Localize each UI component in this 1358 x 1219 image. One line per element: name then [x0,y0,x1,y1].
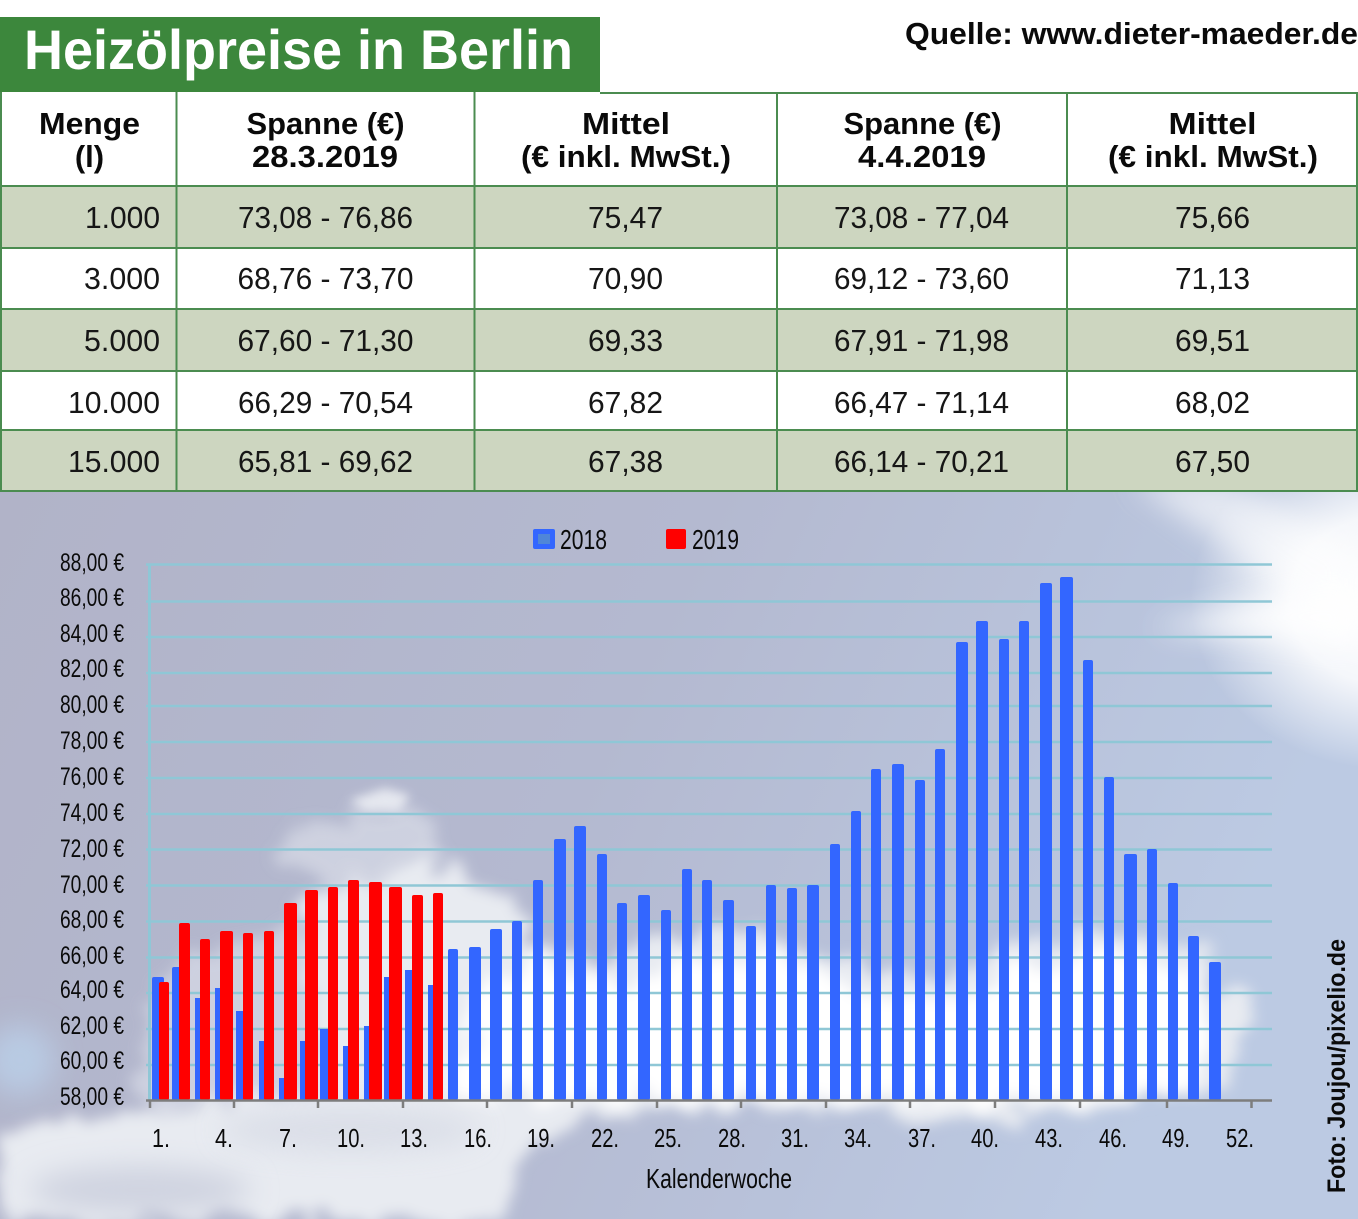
table row: 1.000: 75,47 [588,200,663,235]
x axis labels: 16. [464,1123,492,1153]
y axis labels: 76,00 € [60,763,124,791]
table header row: Mittel [582,106,670,141]
table row: 3.000: 69,12 - 73,60 [834,261,1009,296]
x axis labels: 25. [654,1123,682,1153]
x axis labels: 46. [1099,1123,1127,1153]
table header row: (l) [75,139,104,174]
table row: 3.000: 3.000 [84,261,160,296]
source credit: Quelle: www.dieter-maeder.de [905,16,1358,51]
y axis labels: 72,00 € [60,835,124,863]
table row: 15.000: 67,50 [1175,444,1250,479]
table row shading [1,186,1357,491]
x axis labels: 43. [1035,1123,1063,1153]
table row: 3.000: 68,76 - 73,70 [238,261,414,296]
legend item: 2018 [533,524,607,555]
x axis labels: 13. [400,1123,428,1153]
x axis labels: 28. [718,1123,746,1153]
table row: 15.000 [68,444,1250,479]
table row: 15.000: 67,38 [588,444,663,479]
table row: 1.000: 73,08 - 77,04 [834,200,1009,235]
x axis labels: 22. [591,1123,619,1153]
y axis labels: 70,00 € [60,871,124,899]
y axis labels: 66,00 € [60,942,124,970]
table header row: (€ inkl. MwSt.) [1108,139,1318,174]
bars: 2018 [152,577,1221,1100]
table row: 5.000: 67,60 - 71,30 [238,323,414,358]
table row: 1.000 [85,200,1250,235]
table: heating oil prices [0,92,1358,491]
x axis labels: 7. [279,1123,297,1153]
y axis labels: 64,00 € [60,976,124,1004]
table header row: 28.3.2019 [252,139,398,174]
table row: 1.000: 75,66 [1175,200,1250,235]
x axis labels: 40. [971,1123,999,1153]
table header row: 4.4.2019 [858,139,986,174]
y axis labels: 86,00 € [60,584,124,612]
chart: heating oil price by calendar week [60,524,1272,1194]
y axis labels: 60,00 € [60,1047,124,1075]
y axis labels [60,549,124,1111]
x axis labels: 1. [152,1123,170,1153]
y axis labels: 62,00 € [60,1012,124,1040]
y axis labels: 84,00 € [60,620,124,648]
table row: 15.000: 66,14 - 70,21 [834,444,1009,479]
legend item: 2019 [666,524,739,555]
x axis labels: 37. [908,1123,936,1153]
x axis labels: 10. [337,1123,365,1153]
y axis labels: 80,00 € [60,691,124,719]
title banner: Heizölpreise in Berlin [24,18,573,81]
table row: 10.000: 66,29 - 70,54 [238,385,413,420]
y axis labels: 88,00 € [60,549,124,577]
table row: 15.000: 15.000 [68,444,160,479]
y axis labels: 68,00 € [60,906,124,934]
table header row: Spanne (€) [246,106,404,141]
table header row [39,106,1318,174]
y axis labels: 78,00 € [60,727,124,755]
table header row: Mittel [1168,106,1256,141]
table row: 10.000: 66,47 - 71,14 [834,385,1009,420]
table header row: Menge [39,106,140,141]
x axis labels: 4. [215,1123,233,1153]
table header row: (€ inkl. MwSt.) [521,139,731,174]
table row: 10.000: 67,82 [588,385,663,420]
legend item: 2018: 2018 [560,524,607,555]
table row: 5.000: 5.000 [84,323,160,358]
y axis labels: 74,00 € [60,799,124,827]
table row: 3.000 [84,261,1250,296]
x axis labels [152,1123,1254,1153]
x axis [146,1100,1272,1108]
table row: 10.000: 68,02 [1175,385,1250,420]
x axis labels: 49. [1162,1123,1190,1153]
table row: 5.000 [84,323,1250,358]
table row: 3.000: 70,90 [588,261,663,296]
x axis labels: 34. [844,1123,872,1153]
table row: 10.000 [68,385,1250,420]
table row: 3.000: 71,13 [1175,261,1250,296]
table row: 5.000: 67,91 - 71,98 [834,323,1009,358]
legend [533,524,739,555]
bars: 2019 [159,880,443,1100]
table row: 5.000: 69,33 [588,323,663,358]
y axis labels: 58,00 € [60,1083,124,1111]
table header row: Spanne (€) [844,106,1002,141]
table row: 10.000: 10.000 [68,385,160,420]
x axis labels: 31. [781,1123,809,1153]
table row: 1.000: 1.000 [85,200,160,235]
chart gridlines [146,564,1272,1100]
table row: 15.000: 65,81 - 69,62 [238,444,413,479]
y axis labels: 82,00 € [60,655,124,683]
table row: 5.000: 69,51 [1175,323,1250,358]
x axis title: Kalenderwoche [646,1163,792,1194]
table row: 1.000: 73,08 - 76,86 [238,200,413,235]
photo credit: Foto: Joujou/pixelio.de [1323,939,1351,1193]
legend item: 2019: 2019 [692,524,739,555]
x axis labels: 52. [1226,1123,1254,1153]
panel: sky photo background [0,430,1358,1219]
x axis labels: 19. [527,1123,555,1153]
